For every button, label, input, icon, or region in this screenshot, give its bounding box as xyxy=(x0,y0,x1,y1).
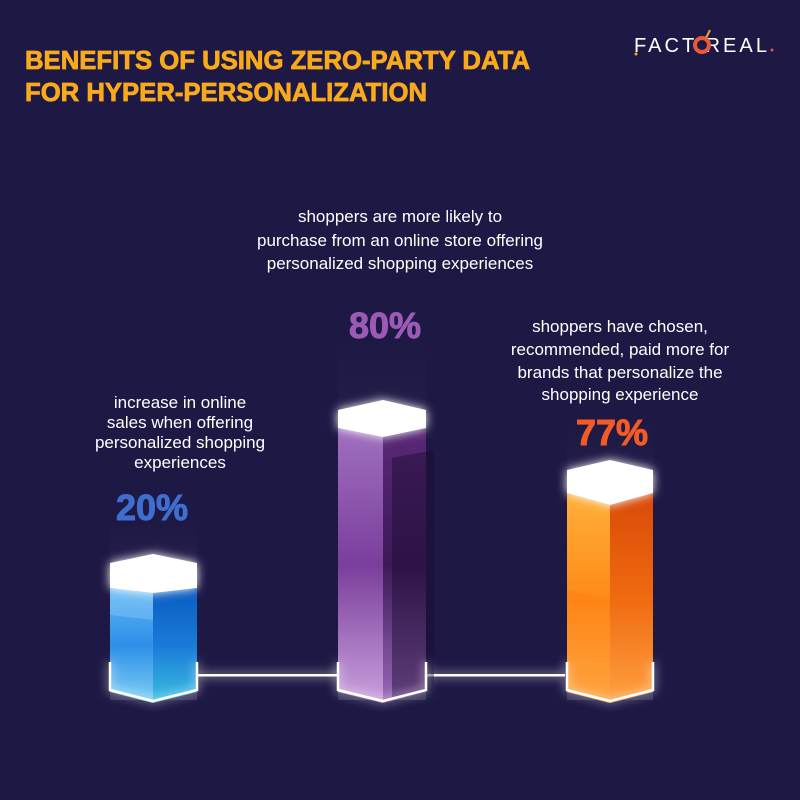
text: left label: personalized shopping xyxy=(95,433,265,452)
text: left label: experiences xyxy=(134,453,226,472)
bar: orange 77% xyxy=(567,420,653,703)
text: middle label xyxy=(257,207,543,273)
title: BENEFITS OF USING ZERO-PARTY DATA xyxy=(25,45,530,75)
text: middle label: personalized shopping experiences xyxy=(267,254,533,273)
connecting line xyxy=(197,674,565,676)
text: left label: sales when offering xyxy=(107,413,253,432)
text: right label: recommended, paid more for xyxy=(511,340,729,359)
stat: 77%: 77% xyxy=(576,412,648,453)
bar: blue 20% xyxy=(110,520,197,703)
text: right label: brands that personalize the xyxy=(517,363,723,382)
title xyxy=(25,45,530,107)
text: middle label: shoppers are more likely to xyxy=(298,207,502,226)
stat: 80%: 80% xyxy=(349,305,421,346)
text: right label: shopping experience xyxy=(542,385,698,404)
logo: factoreal: FACT REAL xyxy=(634,35,770,57)
title: FOR HYPER-PERSONALIZATION xyxy=(25,77,427,107)
text: middle label: purchase from an online store offering xyxy=(257,231,543,250)
stat: 20%: 20% xyxy=(116,487,188,528)
text: right label: shoppers have chosen, xyxy=(532,317,708,336)
text: left label xyxy=(95,393,265,472)
text: right label xyxy=(511,317,729,404)
bar: purple 80% xyxy=(338,340,434,703)
text: left label: increase in online xyxy=(114,393,246,412)
